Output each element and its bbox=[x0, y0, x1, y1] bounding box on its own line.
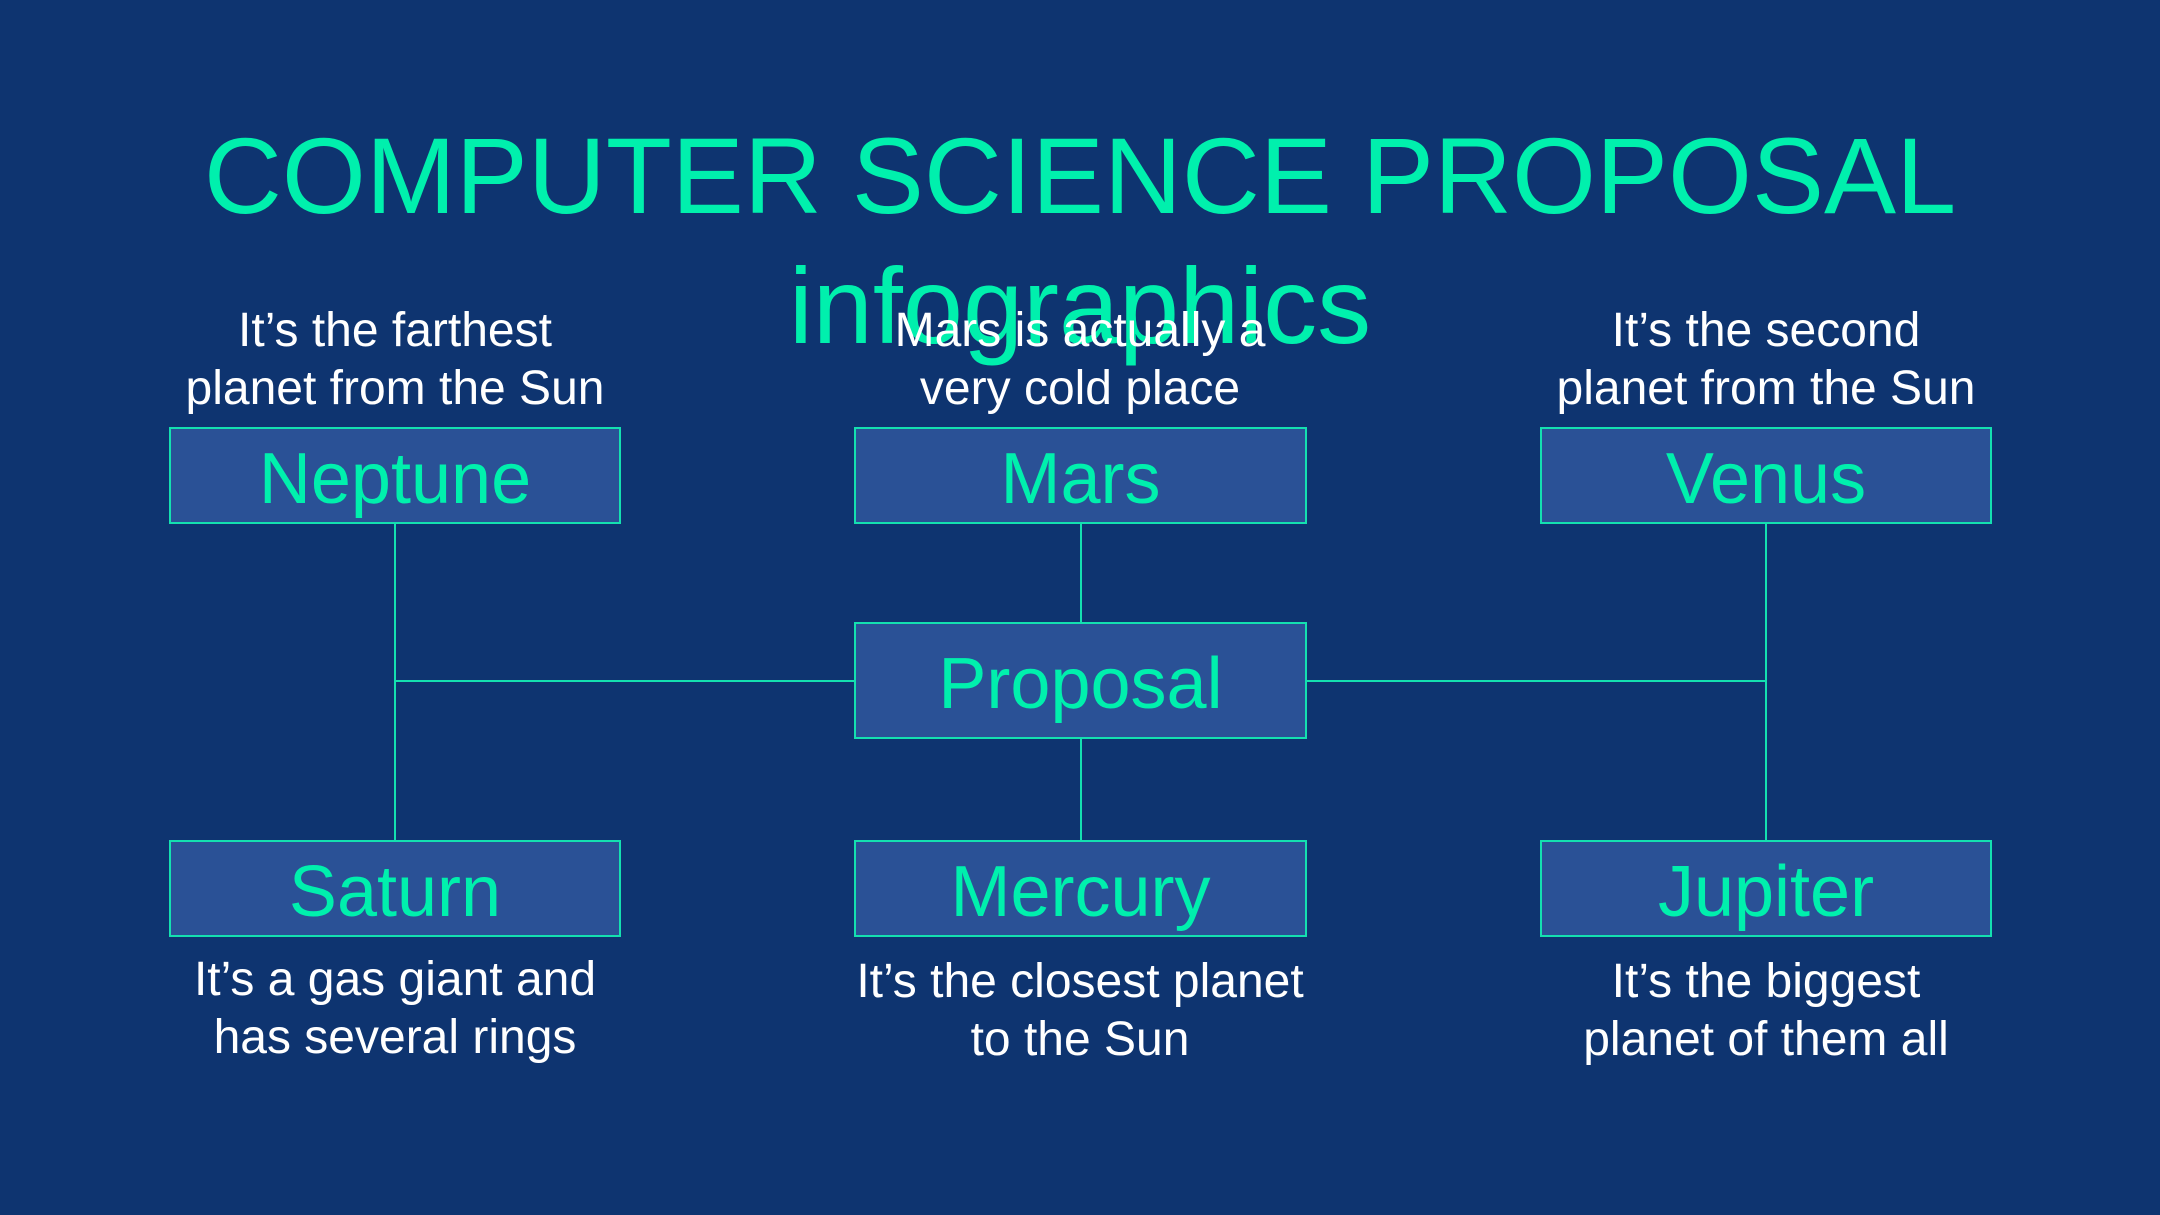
box: Neptune bbox=[169, 427, 621, 524]
box: Proposal: Proposal bbox=[938, 644, 1223, 724]
box: Neptune: Neptune bbox=[259, 439, 531, 519]
description: Saturn bbox=[194, 953, 596, 1064]
box: Mercury: Mercury bbox=[950, 852, 1210, 932]
description: Neptune bbox=[186, 304, 604, 415]
box: Venus bbox=[1540, 427, 1992, 524]
title bbox=[204, 115, 1956, 366]
box: Saturn bbox=[169, 840, 621, 937]
description: Mercury: It’s the closest planet bbox=[856, 955, 1304, 1008]
box: Saturn: Saturn bbox=[289, 852, 501, 932]
title: COMPUTER SCIENCE PROPOSAL bbox=[204, 115, 1956, 236]
description: Jupiter bbox=[1583, 955, 1949, 1066]
description: Saturn: It’s a gas giant and bbox=[194, 953, 596, 1006]
description: Neptune: planet from the Sun bbox=[186, 362, 604, 415]
box: Proposal bbox=[854, 622, 1307, 739]
description: Mars bbox=[895, 304, 1266, 415]
description: Mercury bbox=[856, 955, 1304, 1066]
description: Mercury: to the Sun bbox=[971, 1013, 1189, 1066]
description: Mars: Mars is actually a bbox=[895, 304, 1265, 357]
description: Venus: planet from the Sun bbox=[1557, 362, 1975, 415]
box: Jupiter: Jupiter bbox=[1658, 852, 1874, 932]
description: Jupiter: planet of them all bbox=[1583, 1013, 1949, 1066]
title: infographics bbox=[789, 245, 1371, 366]
box: Mars: Mars bbox=[1000, 439, 1160, 519]
description: Saturn: has several rings bbox=[214, 1011, 576, 1064]
box: Venus: Venus bbox=[1666, 439, 1866, 519]
description: Venus bbox=[1557, 304, 1975, 415]
box: Mercury bbox=[854, 840, 1307, 937]
description: Mars: very cold place bbox=[920, 362, 1240, 415]
description: Neptune: It’s the farthest bbox=[238, 304, 552, 357]
description: Venus: It’s the second bbox=[1612, 304, 1920, 357]
description: Jupiter: It’s the biggest bbox=[1612, 955, 1920, 1008]
box: Jupiter bbox=[1540, 840, 1992, 937]
box: Mars bbox=[854, 427, 1307, 524]
